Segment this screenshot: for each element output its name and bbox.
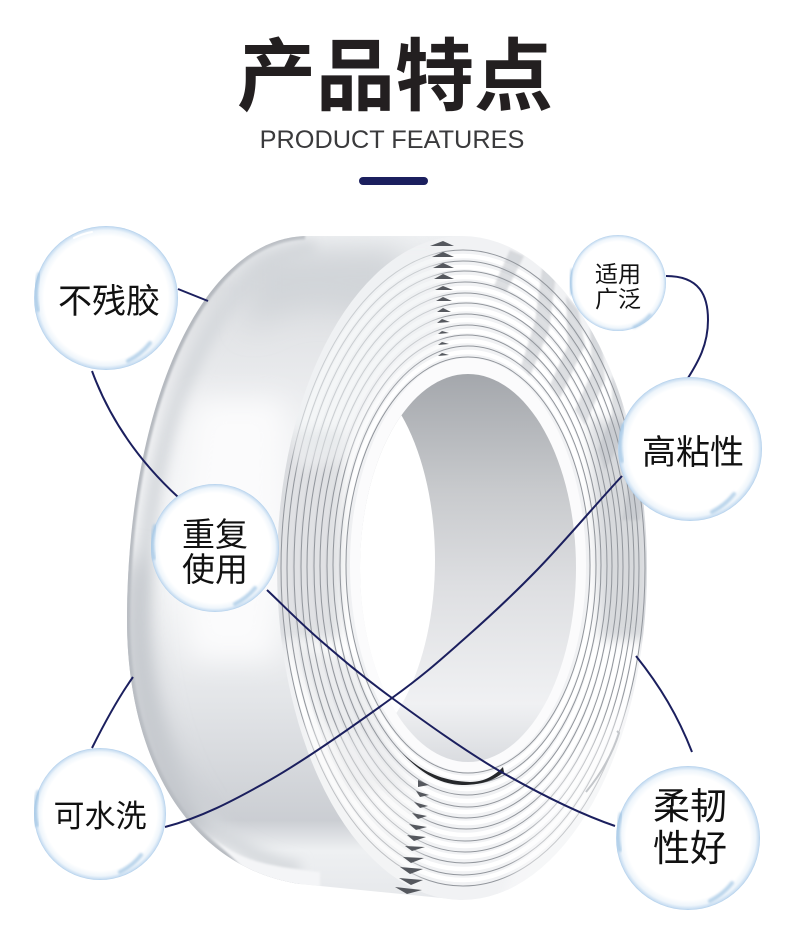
bubble: 高粘性: [618, 377, 762, 521]
bubble: 适用广泛: 适用: [595, 261, 641, 287]
bubble: 高粘性: 高粘性: [642, 434, 744, 472]
bubble: 重复使用: 重复: [182, 516, 248, 553]
subtitle: PRODUCT FEATURES: [260, 126, 524, 154]
bubble: 适用广泛: [570, 235, 666, 331]
tape roll illustration: [127, 236, 650, 900]
layer end markers, top: [430, 241, 454, 356]
dark layer end arc: [402, 753, 504, 785]
layer lines: [281, 250, 645, 886]
shaded stripes on the upper right: [494, 250, 644, 520]
bubble: 不残胶: [34, 226, 178, 370]
bubble: 不残胶: 不残胶: [58, 283, 160, 321]
bubble: 可水洗: 可水洗: [54, 799, 146, 834]
tape body side: [127, 236, 462, 900]
bubble: 柔韧性好: 柔韧: [653, 786, 727, 827]
side shading: [275, 420, 650, 790]
layer end markers, bottom: [395, 780, 429, 894]
bubble: 重复使用: 使用: [182, 551, 248, 588]
tape face with wound layers: [270, 236, 650, 900]
fade of layer lines on the upper left and bottom left: [291, 251, 446, 474]
loose tape end: [586, 731, 619, 792]
bubble: 可水洗: [34, 748, 166, 880]
bubble: 柔韧性好: [616, 766, 760, 910]
white bands: [284, 256, 642, 880]
bubble: 柔韧性好: 性好: [653, 828, 727, 869]
title accent bar: [359, 177, 428, 185]
connector lines: [92, 276, 708, 827]
title: 产品特点: [237, 32, 553, 121]
bubble: 适用广泛: 广泛: [595, 286, 641, 312]
white inner rim and core opening: [350, 358, 586, 772]
bubble: 重复使用: [151, 484, 279, 612]
